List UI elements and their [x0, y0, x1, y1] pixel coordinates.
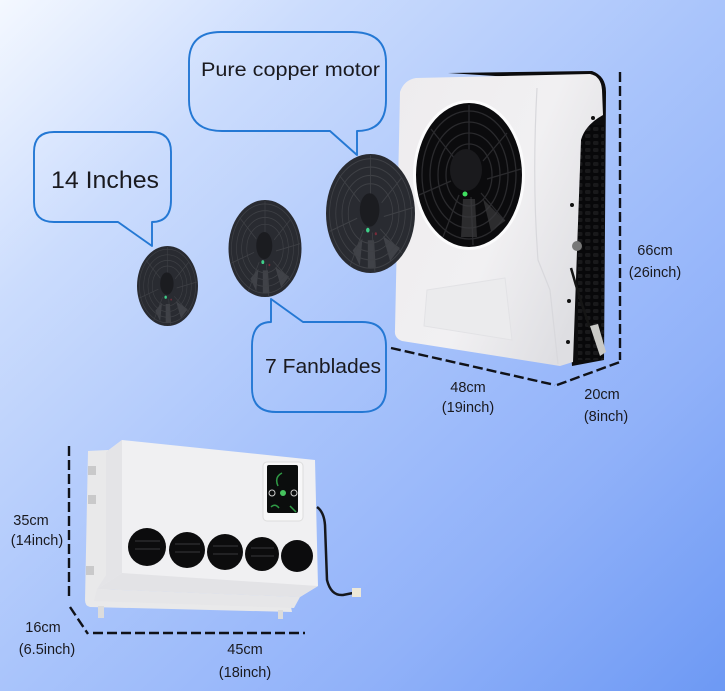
callout: Pure copper motor: Pure copper motor	[201, 59, 381, 81]
callout: 14 Inches	[34, 132, 171, 246]
label: 48cm: (19inch)	[442, 400, 494, 416]
label: 45cm: (18inch)	[219, 665, 271, 681]
wall unit cable	[317, 507, 353, 595]
label: 48cm: 48cm	[450, 380, 486, 396]
unit cable and connector	[571, 268, 590, 328]
callout: 7 Fanblades: 7 Fanblades	[265, 356, 381, 378]
label: 66cm: 66cm	[637, 243, 673, 259]
unit rear fins	[448, 71, 606, 366]
roof air conditioner unit	[395, 71, 606, 366]
callout: 14 Inches: 14 Inches	[51, 167, 159, 194]
label: 45cm: 45cm	[227, 642, 263, 658]
dimension lines: lower unit	[69, 446, 305, 634]
unit fan	[413, 100, 525, 250]
wall unit control panel	[263, 462, 303, 521]
wall unit front housing	[97, 440, 318, 597]
label: 66cm: (26inch)	[629, 265, 681, 281]
fan: large	[326, 154, 415, 273]
wall unit connector	[352, 588, 361, 597]
wall unit	[85, 440, 361, 619]
label: 35cm: 35cm	[13, 513, 49, 529]
label: 35cm: (14inch)	[11, 533, 63, 549]
label: 20cm: (8inch)	[584, 409, 628, 425]
wall unit lower tray	[94, 589, 300, 608]
callout: Pure copper motor	[189, 32, 386, 155]
unit white housing	[395, 74, 603, 366]
callout: 7 Fanblades	[252, 299, 386, 412]
wall unit mounting brackets	[86, 466, 96, 575]
label: 16cm: 16cm	[25, 620, 61, 636]
wall unit feet	[98, 606, 283, 619]
label: 16cm: (6.5inch)	[19, 642, 75, 658]
fan: small	[137, 246, 198, 326]
fan: medium	[228, 200, 302, 297]
label: 20cm: 20cm	[584, 387, 620, 403]
wall unit vents	[128, 528, 313, 572]
dimension lines: upper unit	[391, 72, 620, 385]
wall unit back plate	[85, 450, 292, 612]
